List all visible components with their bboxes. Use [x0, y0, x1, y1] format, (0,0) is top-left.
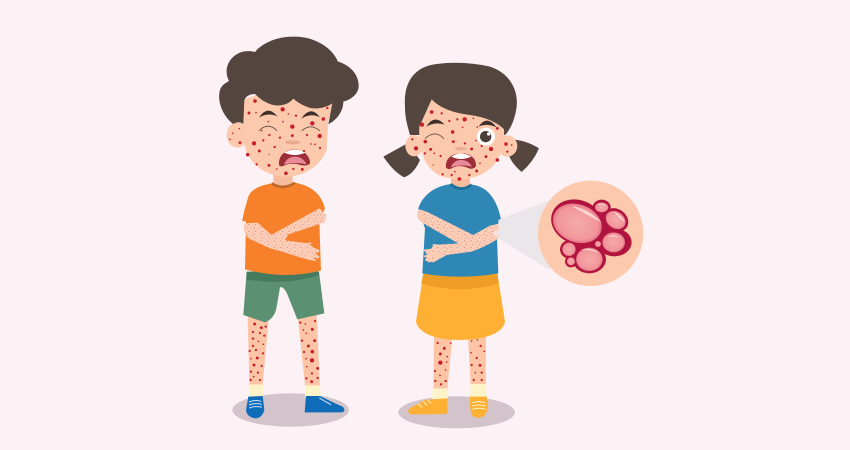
- boy facial rash: [229, 99, 328, 175]
- girl head: [405, 99, 517, 181]
- girl yellow skirt: [416, 273, 505, 340]
- boy: [219, 37, 359, 427]
- girl neck: [451, 178, 470, 191]
- girl legs and shoes: [408, 337, 488, 418]
- girl mouth: [446, 153, 476, 169]
- boy head: [219, 37, 359, 177]
- boy legs and shoes: [246, 315, 344, 418]
- boy ear: [227, 122, 248, 148]
- boy orange shirt: [242, 183, 325, 275]
- boy ground shadow: [232, 393, 349, 427]
- magnifier beam: [498, 198, 553, 270]
- girl blue shirt: [418, 184, 502, 277]
- boy crossed arms with rash: [244, 208, 327, 261]
- girl facial rash: [411, 110, 512, 181]
- boy mouth: [279, 149, 310, 166]
- girl eyes and brows: [425, 119, 497, 146]
- blister cluster: [545, 192, 633, 273]
- boy nose: [285, 140, 300, 144]
- girl crossed arms with rash: [417, 209, 501, 262]
- girl nose: [455, 147, 467, 150]
- girl hair back and pigtails: [383, 63, 539, 177]
- boy neck: [273, 170, 293, 189]
- girl face: [419, 99, 504, 179]
- boy shorts: [243, 272, 324, 322]
- callout: magnified blisters: [498, 181, 643, 286]
- skin circle: [538, 181, 643, 286]
- boy face: [243, 89, 334, 177]
- girl: [383, 63, 539, 428]
- boy eyes and brows: [259, 111, 320, 131]
- boy hair: [219, 37, 359, 124]
- girl ears: [405, 135, 517, 157]
- girl ground shadow: [398, 396, 515, 428]
